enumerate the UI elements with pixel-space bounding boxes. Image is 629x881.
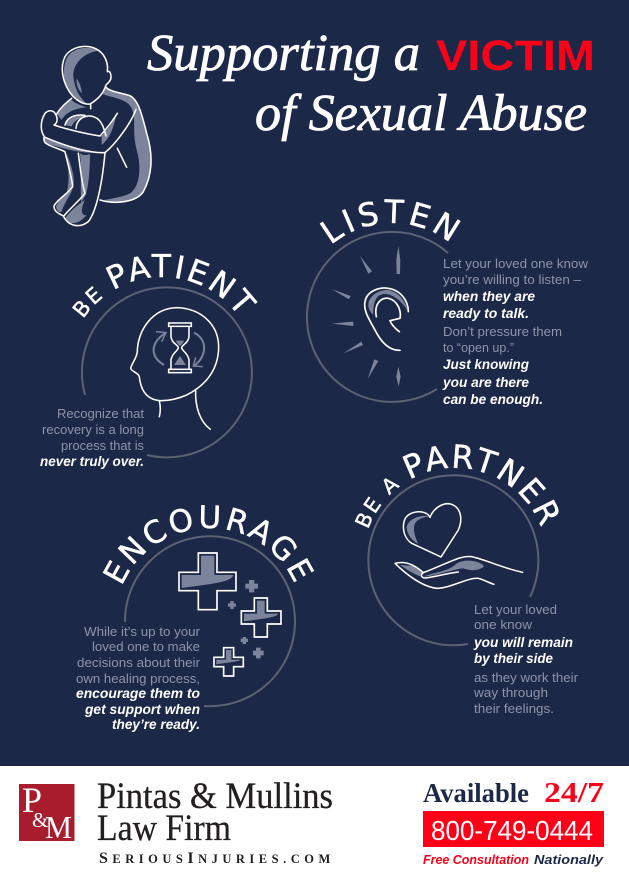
body text: be a partner: one know xyxy=(474,617,533,632)
panel: encourage xyxy=(76,505,314,732)
panel: listen xyxy=(306,199,589,407)
logo: P&M: P xyxy=(22,780,42,820)
body text: encourage xyxy=(76,624,201,732)
body text: encourage: own healing process, xyxy=(76,671,200,686)
body text: listen: Don’t pressure them xyxy=(443,324,562,339)
heading: listen: LISTEN xyxy=(320,199,461,244)
body text: be patient xyxy=(40,406,144,469)
body text: listen: ready to talk. xyxy=(443,306,529,321)
icon: seated figure hugging knees xyxy=(41,46,151,226)
panel: be a partner xyxy=(354,444,579,716)
panel: be patient xyxy=(40,254,258,469)
body text: listen: you’re willing to listen – xyxy=(443,272,582,287)
availability: 24/7 xyxy=(544,778,604,809)
body text: listen: Just knowing xyxy=(443,357,530,372)
body text: be a partner: as they work their xyxy=(474,670,579,685)
title: of Sexual Abuse xyxy=(255,85,587,142)
body text: be a partner xyxy=(473,602,579,716)
firm name: Law Firm xyxy=(97,808,231,849)
icon: heart above open hand xyxy=(395,504,523,588)
logo: P&M xyxy=(19,780,74,845)
availability: Available xyxy=(423,778,529,808)
free consultation line: Nationally xyxy=(534,853,604,867)
body text: be a partner: their feelings. xyxy=(474,701,554,716)
body text: listen: when they are xyxy=(443,289,536,304)
body text: listen: Let your loved one know xyxy=(443,256,589,271)
icon: ear with sound rays xyxy=(332,246,408,387)
body text: be patient: Recognize that xyxy=(57,406,144,421)
circle outline xyxy=(368,475,538,645)
circle outline xyxy=(125,536,295,706)
firm name: SERIOUSINJURIES.COM xyxy=(99,850,335,867)
icon: medical crosses xyxy=(179,553,281,676)
body text: be patient: recovery is a long xyxy=(42,422,144,437)
free consultation line xyxy=(423,853,604,867)
body text: be a partner: you will remain xyxy=(473,635,573,650)
body text: be patient: process that is xyxy=(61,438,144,453)
title: VICTIM xyxy=(436,32,595,80)
body text: listen: can be enough. xyxy=(443,392,543,407)
body text: listen xyxy=(442,256,589,407)
title xyxy=(147,25,595,142)
firm name: Pintas & Mullins xyxy=(97,776,333,817)
heading: be patient: BE PATIENT xyxy=(72,254,258,318)
icon: head with hourglass xyxy=(131,308,219,429)
body text: encourage: get support when xyxy=(84,702,200,717)
body text: be patient: never truly over. xyxy=(40,454,144,469)
body text: encourage: loved one to make xyxy=(92,639,200,654)
circle outline xyxy=(307,232,448,402)
body text: be a partner: by their side xyxy=(474,651,553,666)
title: Supporting a xyxy=(147,25,420,82)
heading: be a partner: BE A PARTNER xyxy=(354,444,558,528)
body text: encourage: While it’s up to your xyxy=(84,624,201,639)
body text: listen: to “open up.” xyxy=(443,340,514,355)
body text: encourage: encourage them to xyxy=(76,686,200,701)
logo: P&M: & xyxy=(32,808,48,832)
footer band xyxy=(0,766,629,881)
body text: be a partner: way through xyxy=(473,685,548,700)
availability xyxy=(423,778,604,809)
body text: encourage: decisions about their xyxy=(77,655,201,670)
phone number box: 800-749-0444 xyxy=(431,815,593,846)
heading: encourage: ENCOURAGE xyxy=(102,505,314,584)
firm name xyxy=(97,776,335,867)
body text: be a partner: Let your loved xyxy=(474,602,557,617)
free consultation line: Free Consultation xyxy=(423,853,529,867)
body text: listen: you are there xyxy=(442,375,529,390)
body text: encourage: they’re ready. xyxy=(112,717,200,732)
logo: P&M: M xyxy=(45,809,72,845)
circle outline xyxy=(82,287,252,457)
